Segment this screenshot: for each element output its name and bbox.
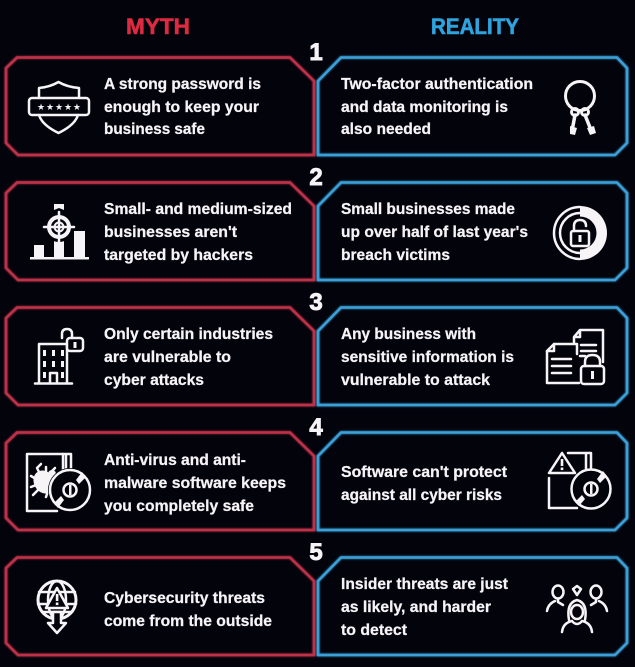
text: reality 4: Software can't protect xyxy=(341,464,507,481)
text: reality 3: Any business with xyxy=(341,326,476,343)
panel: myth 3 xyxy=(6,308,314,405)
text: reality 1: also needed xyxy=(341,121,431,138)
panel: reality 4 xyxy=(318,432,627,530)
text: reality 5: to detect xyxy=(341,622,407,639)
text: myth 3: cyber attacks xyxy=(104,372,204,389)
icon: password shield: ★★★★★ xyxy=(37,103,81,113)
text: myth 3: Only certain industries xyxy=(104,326,273,343)
text: reality 4 xyxy=(341,464,507,504)
text: reality 3 xyxy=(341,326,514,389)
text: myth 5: Cybersecurity threats xyxy=(104,590,265,607)
icon: lock in circle xyxy=(554,206,607,260)
text: myth 3 xyxy=(104,326,273,389)
icon: target on bar chart xyxy=(30,204,89,260)
icon: insider people xyxy=(547,586,607,632)
text: myth 3: are vulnerable to xyxy=(104,349,231,366)
icon: documents with lock xyxy=(547,330,604,384)
text: reality 1: and data monitoring is xyxy=(341,99,508,116)
text: reality 5 xyxy=(341,576,508,639)
text: myth 4: Anti-virus and anti- xyxy=(104,452,246,469)
text: reality 3: sensitive information is xyxy=(341,349,514,366)
number 2: 2 xyxy=(309,164,323,191)
panel: myth 1 xyxy=(6,58,314,155)
text: myth 1 xyxy=(104,76,261,138)
panel: myth 5 xyxy=(6,558,314,655)
text: reality 5: as likely, and harder xyxy=(341,599,491,616)
text: reality 4: against all cyber risks xyxy=(341,487,502,504)
panel: reality 1 xyxy=(318,58,627,155)
text: reality 2: Small businesses made xyxy=(341,201,515,218)
panel: myth 2 xyxy=(6,182,314,280)
text: myth 4: you completely safe xyxy=(104,498,254,515)
text: reality 2: up over half of last year's xyxy=(341,224,528,241)
panel: reality 3 xyxy=(318,308,627,405)
text: reality 2 xyxy=(341,201,528,264)
panel: myth 4 xyxy=(6,432,314,530)
text: myth 4 xyxy=(104,452,286,515)
text: myth 2: targeted by hackers xyxy=(104,247,253,264)
number 4: 4 xyxy=(309,414,323,441)
text: myth 5: come from the outside xyxy=(104,613,272,630)
icon: keys xyxy=(566,82,596,135)
number 1: 1 xyxy=(309,39,323,66)
text: myth 1: enough to keep your xyxy=(104,99,259,116)
text: reality 1: Two-factor authentication xyxy=(341,76,533,93)
panel: reality 2 xyxy=(318,182,627,280)
text: myth 5 xyxy=(104,590,272,630)
text: reality 5: Insider threats are just xyxy=(341,576,508,593)
icon: spider and disc xyxy=(27,454,92,512)
heading: MYTH: MYTH xyxy=(126,14,190,39)
icon: globe with warning and arrow xyxy=(38,581,76,633)
text: myth 4: malware software keeps xyxy=(104,475,286,492)
text: reality 2: breach victims xyxy=(341,247,450,264)
number 5: 5 xyxy=(309,539,323,566)
text: myth 1: business safe xyxy=(104,121,205,138)
text: myth 2 xyxy=(104,201,292,264)
text: myth 1: A strong password is xyxy=(104,76,261,93)
text: myth 2: businesses aren't xyxy=(104,224,237,241)
heading: REALITY: REALITY xyxy=(431,14,519,39)
icon: password shield xyxy=(29,82,89,133)
text: myth 2: Small- and medium-sized xyxy=(104,201,292,218)
text: reality 1 xyxy=(341,76,533,138)
text: reality 3: vulnerable to attack xyxy=(341,372,490,389)
icon: warning document and disc xyxy=(549,453,610,508)
number 3: 3 xyxy=(309,289,323,316)
panel: reality 5 xyxy=(318,558,627,655)
icon: building with open lock xyxy=(35,329,83,384)
